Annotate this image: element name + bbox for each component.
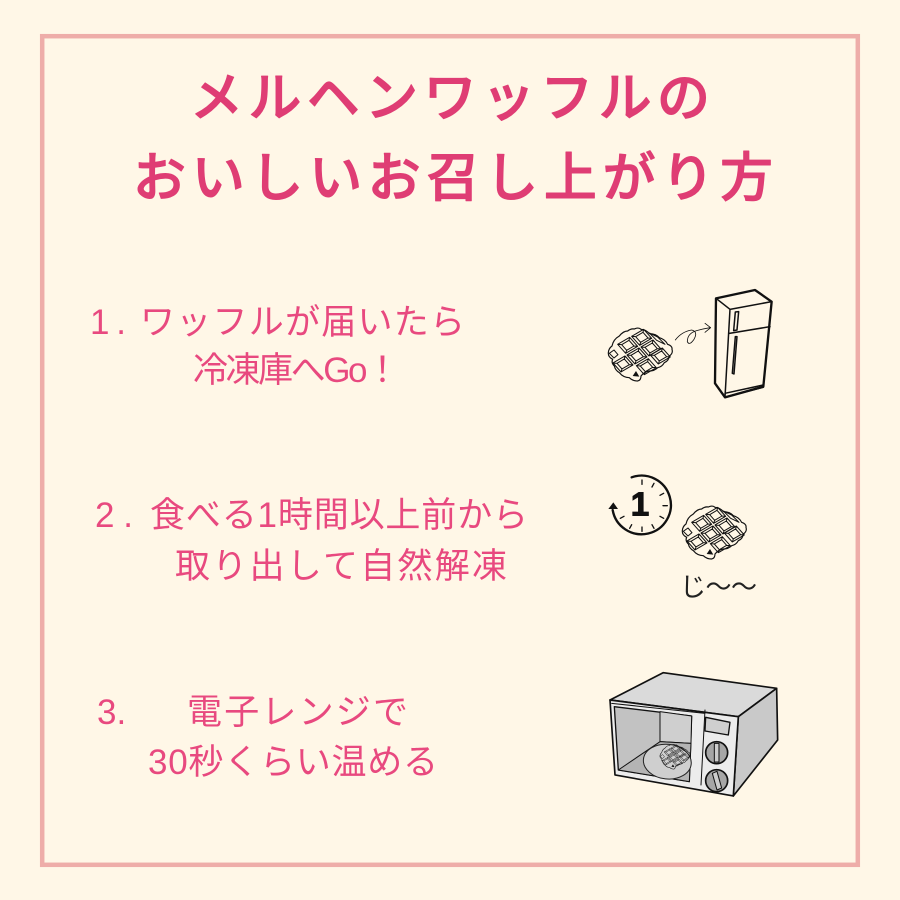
icon: one hour clock: 1 <box>631 487 649 524</box>
step 1 text: ワッフルが届いたら <box>140 303 465 342</box>
icon: microwave <box>610 673 778 796</box>
title: おいしいお召し上がり方 <box>133 149 773 208</box>
title <box>133 69 773 208</box>
arrow <box>675 323 711 343</box>
label: thawing sound: じ〜〜 <box>680 572 757 602</box>
fridge <box>715 290 772 397</box>
step 3 text: 電子レンジで <box>187 693 408 732</box>
step 1 text: 冷凍庫へGo！ <box>193 351 400 390</box>
step 1 text <box>90 303 465 390</box>
step 1 text: 1. <box>90 303 126 342</box>
step 2 text <box>95 496 528 586</box>
step 3 text: 3. <box>97 693 126 732</box>
title: メルヘンワッフルの <box>190 69 710 128</box>
step 3 text <box>97 693 438 782</box>
step 2 text: 食べる1時間以上前から <box>150 496 528 535</box>
icon: waffle going to fridge <box>608 290 772 397</box>
icon: thawing waffle <box>682 506 746 559</box>
step 3 text: 30秒くらい温める <box>148 743 438 782</box>
step 2 text: 2. <box>95 496 133 535</box>
icon: one hour clock <box>608 476 671 534</box>
step 2 text: 取り出して自然解凍 <box>175 547 507 586</box>
